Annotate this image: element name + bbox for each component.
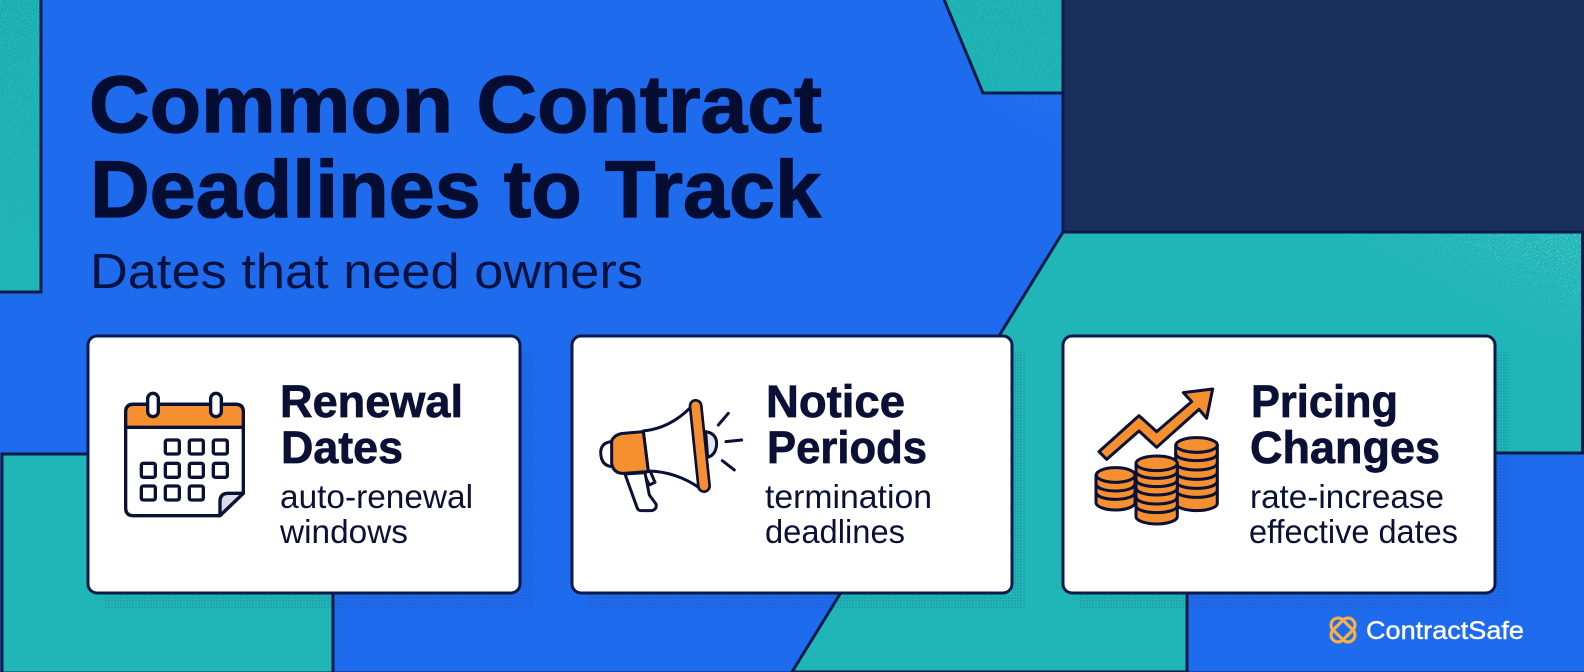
- background shape: lower right blue block: [1187, 453, 1584, 672]
- card heading: renewal dates: Dates: [281, 422, 403, 473]
- card heading: notice periods: [766, 376, 927, 473]
- panel: pricing changes card: [1063, 336, 1509, 608]
- title: [89, 60, 822, 235]
- icon: megaphone: [601, 406, 742, 511]
- card text: auto-renewal windows: windows: [279, 514, 408, 551]
- card heading: pricing changes: Pricing: [1251, 376, 1398, 427]
- subtitle: Dates that need owners: [90, 245, 643, 299]
- card text: rate-increase effective dates: effective dates: [1249, 514, 1458, 551]
- title: Common Contract: [89, 60, 822, 150]
- title: Deadlines to Track: [90, 145, 822, 235]
- background shape: lower left teal block: [2, 454, 333, 672]
- card heading: notice periods: Notice: [766, 376, 905, 427]
- card text: rate-increase effective dates: rate-increase: [1250, 479, 1444, 516]
- background shape: navy block: [1063, 0, 1584, 232]
- card text: termination deadlines: [765, 479, 932, 551]
- card text: auto-renewal windows: auto-renewal: [280, 479, 473, 516]
- card text: termination deadlines: termination: [765, 479, 932, 516]
- panel: renewal dates card: [88, 336, 534, 608]
- logo: ContractSafe: [1328, 615, 1524, 645]
- card heading: pricing changes: [1250, 376, 1440, 473]
- card heading: renewal dates: [280, 376, 463, 473]
- card heading: renewal dates: Renewal: [280, 376, 463, 427]
- background shape: bottom edge line: [0, 671, 1584, 672]
- card text: rate-increase effective dates: [1249, 479, 1458, 551]
- icon: logo knot: [1328, 615, 1358, 645]
- card text: auto-renewal windows: [279, 479, 473, 551]
- background shape: left teal strip: [0, 0, 41, 292]
- icon: calendar: [126, 393, 243, 516]
- background shape: top teal wedge: [943, 0, 1063, 190]
- icon: coins and rising arrow: [1096, 389, 1217, 524]
- card text: termination deadlines: deadlines: [765, 514, 905, 551]
- logo: ContractSafe: ContractSafe: [1366, 617, 1524, 645]
- panel: notice periods card: [572, 336, 1026, 608]
- card heading: notice periods: Periods: [767, 422, 927, 473]
- card heading: pricing changes: Changes: [1250, 422, 1440, 473]
- background shape: central teal band: [792, 232, 1582, 672]
